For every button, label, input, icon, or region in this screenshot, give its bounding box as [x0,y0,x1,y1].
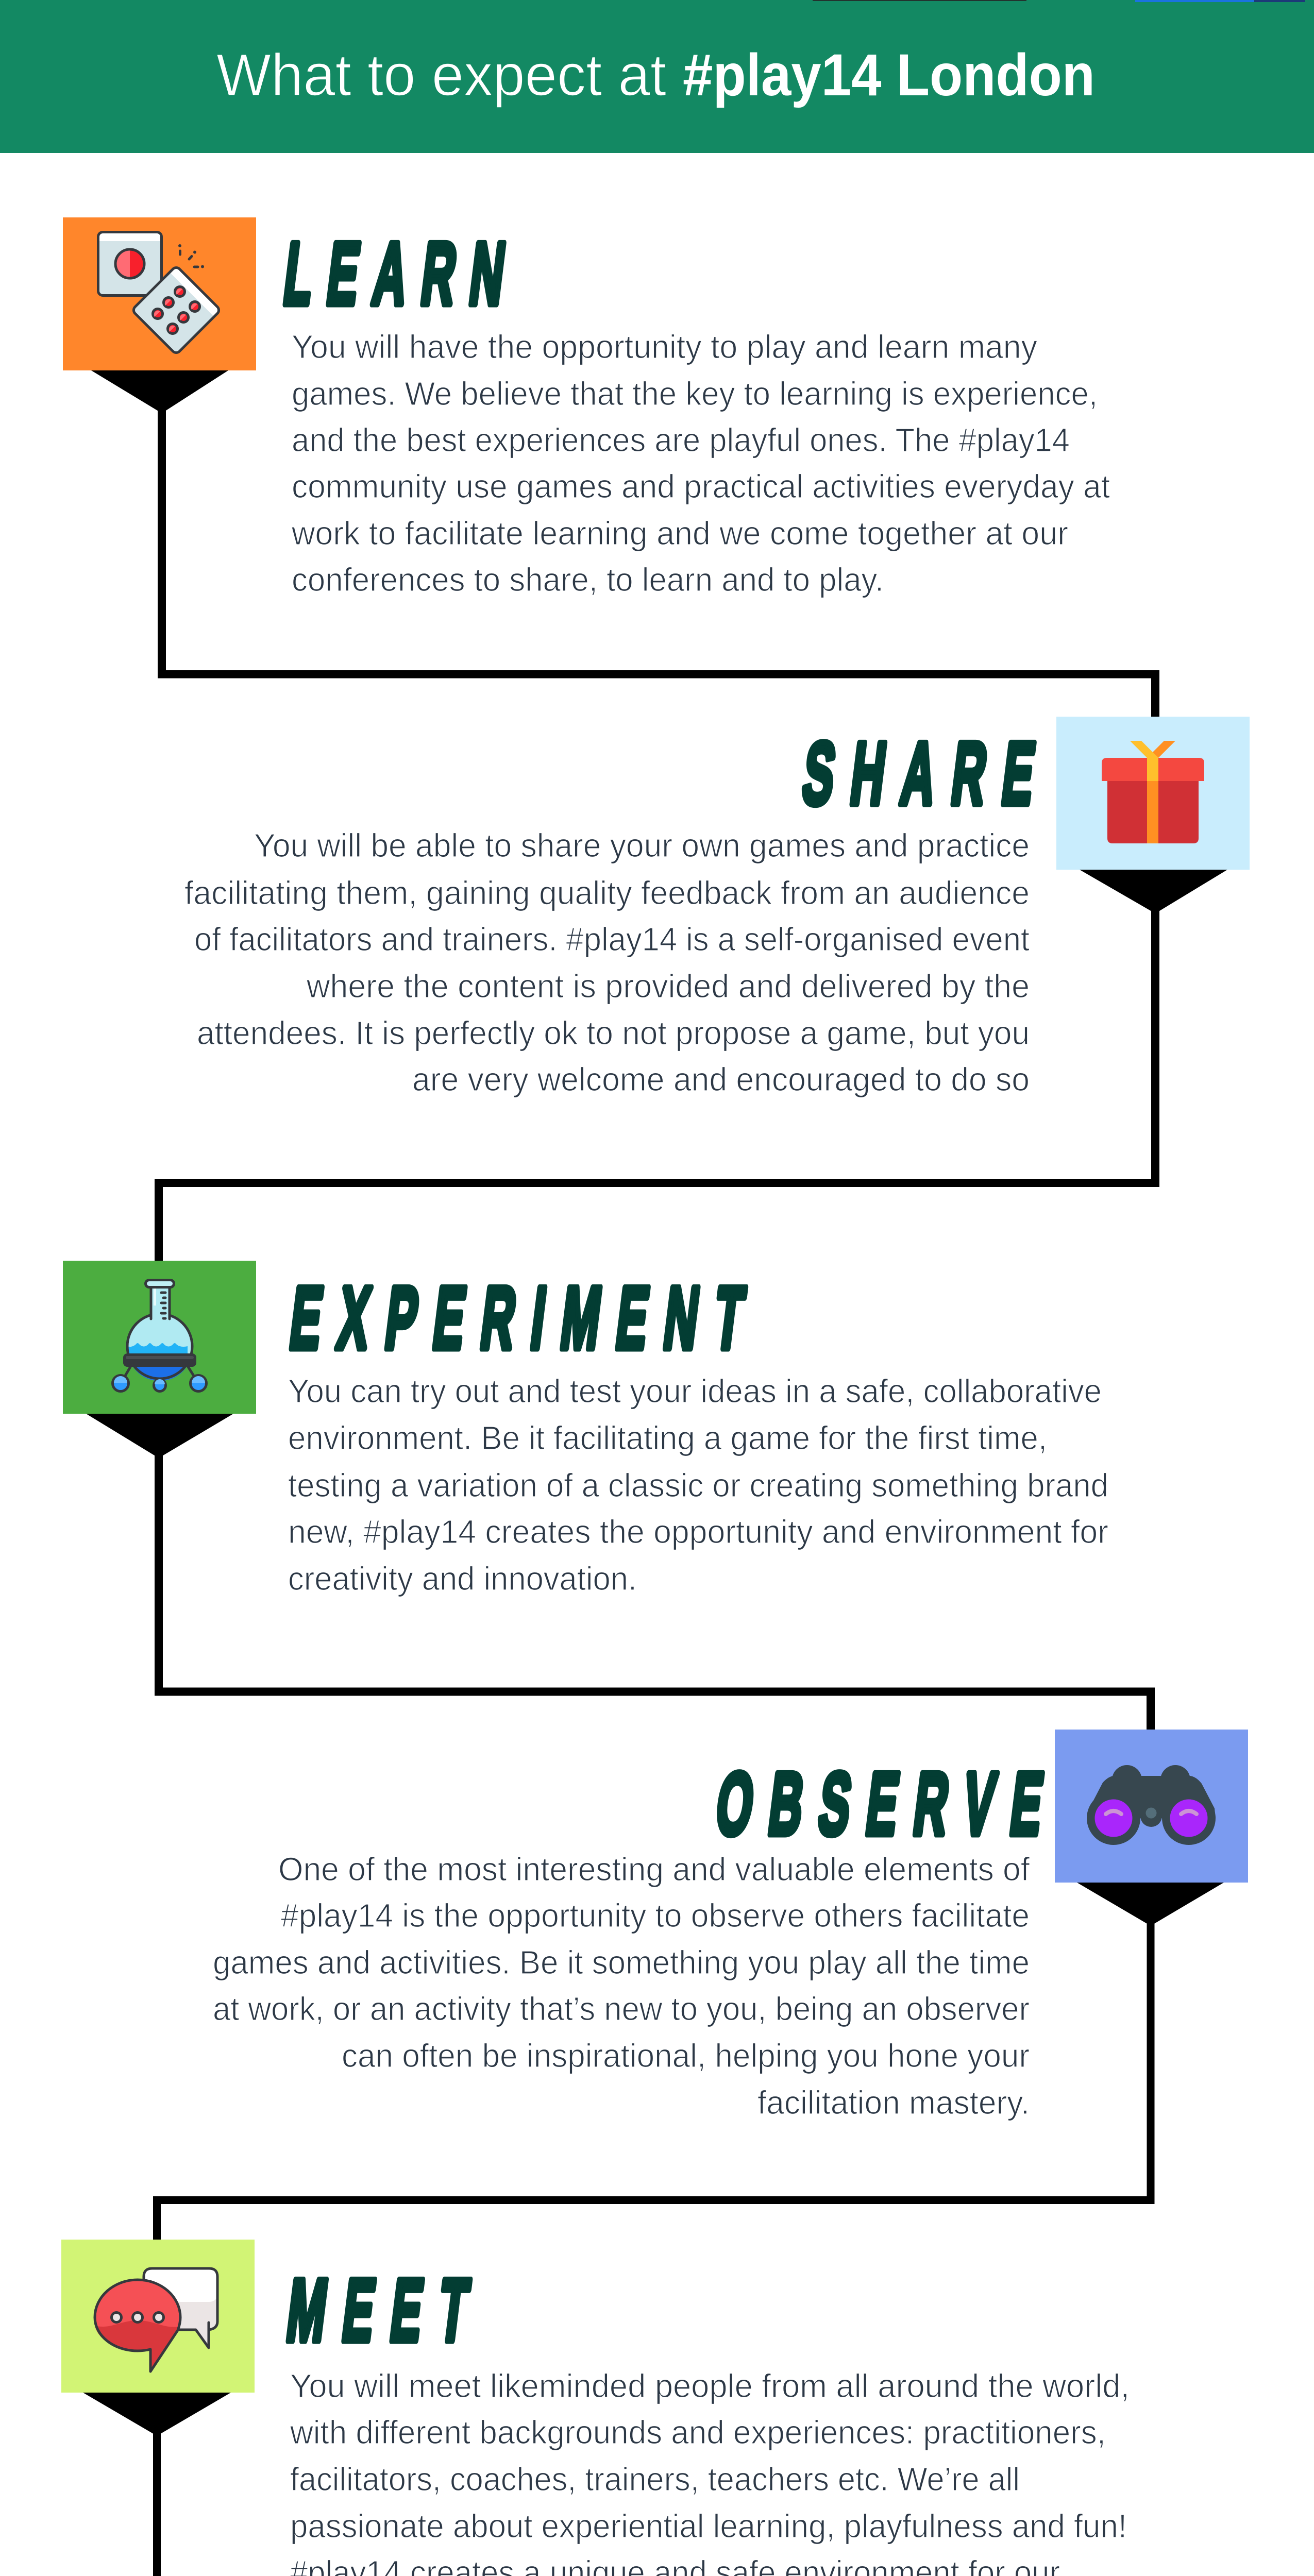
icon tile: binoculars [1055,1730,1248,1926]
body text: meet [290,2367,1130,2576]
body text: observe: games and activities. Be it something you play all the time [213,1944,1030,1981]
body text: learn: work to facilitate learning and we come together at our [291,515,1068,552]
icon tile: gift [1056,717,1250,913]
panel: share [184,717,1250,1098]
connector: meet to and more [157,2429,1145,2576]
body text: learn [291,328,1110,598]
title [216,42,1095,108]
body text: share: where the content is provided and delivered by the [306,968,1030,1005]
panel: observe [213,1730,1248,2121]
body text: observe: One of the most interesting and valuable elements of [278,1851,1030,1888]
body text: experiment [288,1372,1108,1597]
panel: experiment [63,1261,1108,1597]
body text: share: attendees. It is perfectly ok to not propose a game, but you [197,1014,1030,1052]
body text: observe [213,1851,1030,2121]
body text: share: You will be able to share your own games and practice [254,827,1030,864]
body text: meet: with different backgrounds and experiences: practitioners, [290,2414,1106,2451]
icon tile: dice [63,217,256,413]
body text: learn: conferences to share, to learn and to play. [292,561,884,598]
body text: learn: and the best experiences are playful ones. The #play14 [292,421,1070,459]
body text: share: facilitating them, gaining quality feedback from an audience [184,874,1030,911]
icon tile: speech bubbles [61,2240,255,2436]
body text: learn: games. We believe that the key to learning is experience, [292,375,1098,412]
heading: observe: OBSERVE [711,1755,1048,1853]
heading: experiment: EXPERIMENT [285,1269,749,1367]
body text: observe: facilitation mastery. [757,2084,1030,2121]
icon tile: flask [63,1261,256,1458]
panel: meet [61,2240,1130,2576]
body text: share: are very welcome and encouraged to do so [412,1061,1030,1098]
heading: meet: MEET [282,2262,474,2360]
panel: learn [63,217,1110,598]
connector: share to experiment [159,907,1155,1261]
body text: observe: can often be inspirational, helping you hone your [342,2037,1030,2074]
body text: learn: community use games and practical activities everyday at [292,468,1110,505]
body text: experiment: You can try out and test your ideas in a safe, collaborative [288,1372,1102,1410]
body text: meet: facilitators, coaches, trainers, teachers etc. We’re all [290,2461,1020,2498]
body text: experiment: testing a variation of a classic or creating something brand [288,1467,1108,1504]
body text: share: of facilitators and trainers. #play14 is a self-organised event [194,921,1030,958]
title: What to expect at [216,42,666,108]
body text: meet: passionate about experiential learning, playfulness and fun! [290,2507,1127,2545]
body text: experiment: environment. Be it facilitating a game for the first time, [288,1419,1047,1456]
body text: observe: at work, or an activity that’s new to you, being an observer [213,1990,1030,2027]
body text: meet: You will meet likeminded people from all around the world, [290,2367,1130,2404]
heading: share: SHARE [798,725,1040,823]
connector: learn to share [162,407,1155,717]
body text: learn: You will have the opportunity to play and learn many [292,328,1037,365]
connector: observe to meet [157,1919,1151,2240]
header banner [0,0,1314,153]
body text: observe: #play14 is the opportunity to observe others facilitate [281,1897,1030,1934]
body text: experiment: new, #play14 creates the opportunity and environment for [288,1513,1108,1550]
title: #play14 London [683,42,1095,108]
heading: learn: LEARN [279,225,510,323]
body text: share [184,827,1030,1098]
body text: experiment: creativity and innovation. [288,1560,637,1597]
connector: experiment to observe [159,1450,1151,1730]
